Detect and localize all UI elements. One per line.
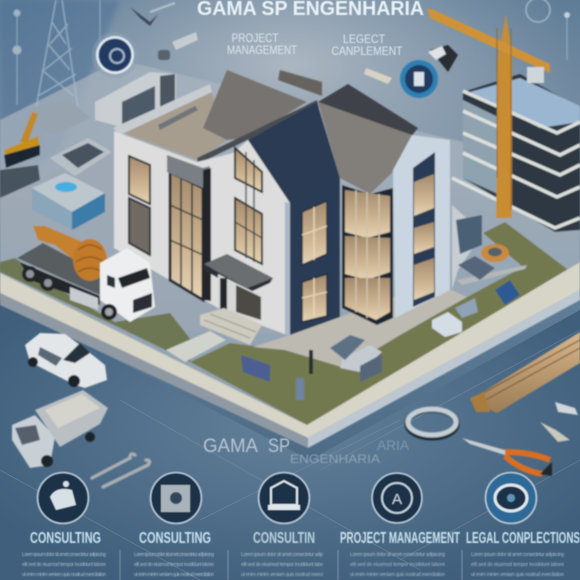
service: legal completions [466, 472, 580, 578]
capsule prop [364, 68, 392, 84]
service: consulting 3: CONSULTIN [253, 530, 315, 547]
equipment on right lot [432, 215, 520, 337]
service: consulting 2: elit sed do eiusmod tempor incididunt labore [134, 562, 214, 568]
small gadgets [158, 32, 198, 60]
blueprint title: GAMA [203, 436, 258, 457]
service: consulting 1: ut enim minim veniam quis nostrud exercitation [22, 572, 106, 578]
forecourt [253, 290, 467, 368]
label: project management [227, 31, 298, 57]
icon: circuit gear [150, 472, 202, 524]
icon: document ring: A [392, 491, 402, 508]
windows [129, 156, 150, 204]
gable edge strip [197, 100, 318, 164]
service: legal completions: ut enim minim veniam quis nostrud exercitation [471, 572, 564, 578]
top badge icon [92, 32, 138, 78]
left white wall [114, 131, 290, 336]
icon: laptop [258, 472, 310, 524]
dump truck [12, 390, 108, 468]
service: legal completions: elit sed do eiusmod tempor incididunt labore [471, 562, 564, 568]
service: project management: PROJECT MANAGEMENT [340, 530, 460, 547]
blueprint title: SP [268, 436, 290, 457]
excavator [4, 112, 40, 168]
tan right terrace [407, 135, 448, 157]
service: project management: Lorem ipsum dolor sit amet consectetur adipiscing [350, 552, 445, 558]
tower base [28, 100, 90, 135]
flatbed truck with cable spool [17, 226, 155, 322]
metal ring [407, 409, 457, 438]
blueprint title: ARIA [377, 437, 410, 453]
crane and scaffold building [427, 9, 580, 232]
lattice tower [13, 0, 100, 108]
service: consulting 1: Lorem ipsum dolor sit amet consectetur adipiscing [22, 552, 106, 558]
entrance canopy [204, 254, 273, 288]
service: consulting 2: ut enim minim veniam quis nostrud exercitation [134, 572, 214, 578]
blueprint title: ENGENHARIA [290, 452, 380, 466]
lock badge icon [400, 60, 438, 98]
bay window [342, 185, 393, 325]
lot: ground plot with curb [0, 60, 580, 448]
AC units [95, 72, 176, 128]
top-right small icons [526, 0, 570, 60]
service: consulting 2 [134, 472, 214, 578]
drone [130, 3, 175, 26]
main building [113, 70, 450, 362]
service: project management: elit sed do eiusmod tempor incididunt labore [350, 562, 445, 568]
hand tools right [540, 402, 578, 442]
service: legal completions: Lorem ipsum dolor sit amet consectetur adipiscing [471, 552, 564, 558]
label: legal complement: LEGECT [343, 32, 386, 46]
flat terrace roof [115, 88, 228, 160]
stack of wooden beams [470, 332, 580, 413]
label: project management: PROJECT [232, 31, 279, 45]
left lawn strip [0, 258, 195, 362]
rear gray roof [203, 70, 307, 140]
service: project management [340, 473, 460, 578]
icon: consulting helmet [38, 472, 88, 524]
camera [428, 45, 458, 72]
dark ridge [318, 84, 418, 136]
paving strip [457, 265, 527, 285]
wrench tools [92, 454, 150, 487]
navy gable [248, 102, 340, 203]
label: legal complement: CANPLEMENT [332, 44, 403, 58]
service: consulting 3: elit sed do eiusmod tempor incididunt labo [241, 562, 323, 568]
service: project management: ut enim minim veniam quis nostrud exercitation [350, 572, 445, 578]
blueprint title [203, 436, 410, 466]
gray right roof [318, 102, 412, 194]
label: project management: MANAGEMENT [227, 43, 298, 57]
front lawn [190, 222, 575, 425]
service: consulting 2: CONSULTING [139, 530, 211, 547]
service: consulting 1 [22, 472, 106, 578]
service: consulting 2: Lorem ipsum dolor sit amet consectetur adipiscing [134, 552, 214, 558]
machinery left [0, 138, 112, 198]
service: consulting 1: CONSULTING [30, 530, 101, 547]
service: consulting 3 [241, 472, 323, 578]
rooftop debris [278, 70, 322, 96]
service: consulting 1: elit sed do eiusmod tempor incididunt labore [22, 562, 106, 568]
icon: target [486, 472, 536, 524]
navy wall [290, 178, 340, 335]
label: legal complement [332, 32, 403, 58]
right wall [393, 135, 450, 318]
pool module [32, 173, 105, 230]
small props in plot [241, 335, 382, 400]
orange pliers [462, 438, 552, 476]
service: consulting 3: ut enim minim veniam quis nostrud exerci [241, 572, 323, 578]
service: consulting 3: Lorem ipsum dolor sit amet consectetur adip [241, 552, 323, 558]
police-style white car [25, 333, 107, 388]
entrance steps [200, 308, 262, 345]
